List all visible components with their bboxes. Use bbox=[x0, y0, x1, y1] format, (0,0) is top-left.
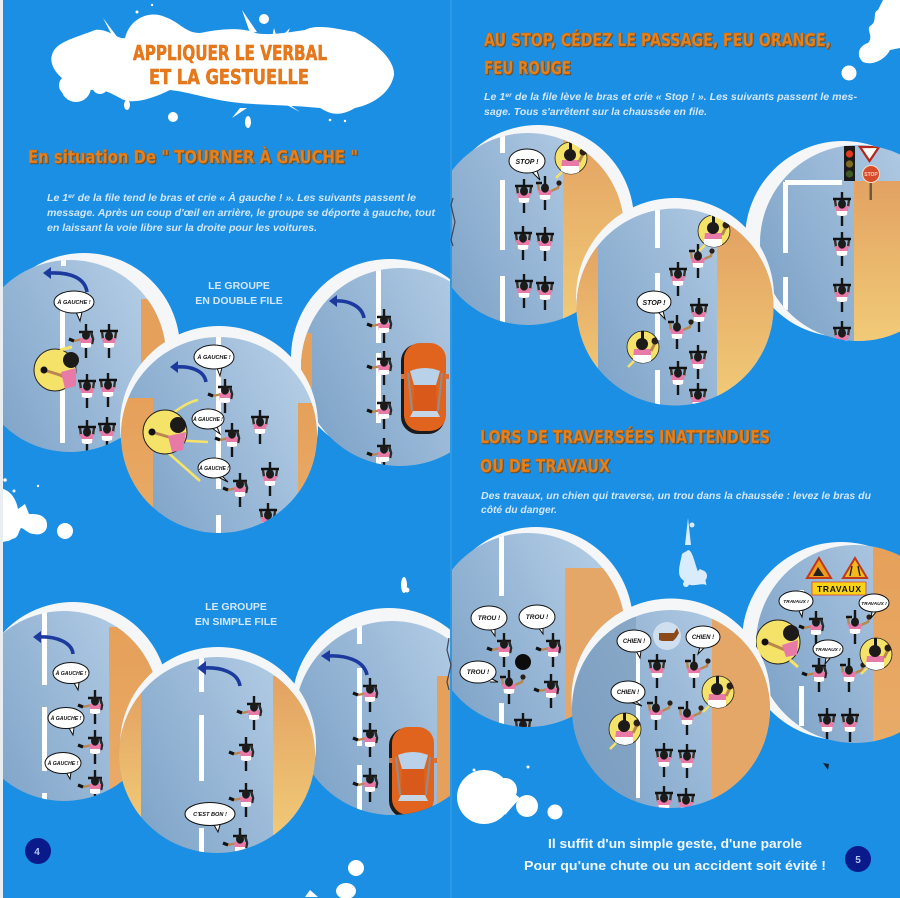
speech bubble: CHIEN ! bbox=[623, 639, 645, 645]
hole in the road bbox=[515, 654, 531, 670]
roadworks sign bbox=[807, 558, 831, 578]
page number 4 bbox=[25, 838, 51, 864]
speech bubble bbox=[198, 458, 230, 482]
intro text: traversées: côté du danger. bbox=[481, 505, 557, 516]
yellow inset bbox=[698, 215, 730, 251]
speech bubble bbox=[859, 594, 889, 618]
speech bubble: STOP ! bbox=[643, 300, 666, 307]
speech bubble bbox=[54, 291, 94, 321]
yellow inset bbox=[34, 347, 79, 391]
speech bubble: À GAUCHE ! bbox=[50, 715, 82, 722]
speech bubble bbox=[519, 605, 555, 634]
speech bubble bbox=[611, 681, 645, 706]
speech bubble: TROU ! bbox=[526, 614, 549, 621]
speech bubble bbox=[48, 708, 84, 735]
intro text: tourner à gauche: de la file tend le bras et crie « À gauche ! ». Les suivants passent le bbox=[75, 191, 416, 204]
stop sign bbox=[862, 166, 880, 200]
yellow inset with arrows bbox=[143, 400, 208, 481]
heading: au stop: FEU ROUGE bbox=[484, 58, 571, 79]
intro text: traversées bbox=[481, 491, 871, 516]
car bbox=[389, 727, 437, 818]
travaux panel: TRAVAUX bbox=[817, 584, 861, 594]
intro text: tourner à gauche: en laissant la voie libre sur la droite pour les voitures. bbox=[47, 223, 317, 234]
label: groupe en simple file bbox=[196, 603, 277, 625]
panel: double file 1 bbox=[3, 253, 179, 452]
page number 4: 4 bbox=[34, 847, 40, 858]
center fold bbox=[450, 0, 452, 898]
label: groupe en double file: EN DOUBLE FILE bbox=[195, 295, 283, 307]
panel: double file 3 bbox=[291, 259, 450, 466]
speech bubble: TRAVAUX ! bbox=[815, 647, 841, 653]
title: ET LA GESTUELLE bbox=[149, 65, 309, 89]
panel: travaux 2 (chien) bbox=[570, 598, 774, 822]
closing message bbox=[524, 836, 826, 873]
left page bbox=[0, 4, 499, 898]
speech bubble bbox=[509, 149, 545, 180]
intro text: au stop: sage. Tous s'arrêtent sur la chaussée en file. bbox=[484, 107, 707, 118]
panel: stop 3 bbox=[745, 141, 900, 355]
intro text: au stop: er bbox=[505, 92, 512, 99]
title bbox=[132, 44, 327, 84]
panel: simple file 2 bbox=[117, 647, 319, 862]
small insect mark bbox=[823, 763, 829, 770]
intro text: au stop: de la file lève le bras et crie « Stop ! ». Les suivants passent le mes- bbox=[512, 92, 858, 103]
label: groupe en simple file: LE GROUPE bbox=[205, 601, 267, 613]
intro text: au stop bbox=[484, 92, 858, 118]
white splash: left bbox=[3, 478, 73, 542]
panel: simple file 1 bbox=[0, 602, 169, 807]
speech bubble bbox=[637, 291, 671, 319]
speech bubble: TRAVAUX ! bbox=[783, 599, 809, 605]
panel: travaux 1 (trou) bbox=[431, 527, 633, 747]
page number 5: 5 bbox=[855, 855, 861, 866]
speech bubble bbox=[185, 802, 235, 832]
arrow: turn left bbox=[321, 650, 367, 675]
staple top bbox=[451, 198, 455, 246]
speech bubble: À GAUCHE ! bbox=[196, 354, 231, 361]
arrow: turn left bbox=[43, 267, 87, 292]
dog crossing bbox=[653, 622, 681, 650]
speech bubble: STOP ! bbox=[516, 159, 539, 166]
panel: stop 1 bbox=[452, 125, 633, 325]
heading: traversées: OU DE TRAVAUX bbox=[480, 456, 610, 477]
panel: simple file 3 bbox=[294, 608, 450, 815]
arrow: turn left bbox=[329, 295, 364, 318]
closing message: Pour qu'une chute ou un accident soit évité ! bbox=[524, 858, 826, 873]
arrow: turn left bbox=[33, 631, 73, 654]
panel: double file 2 bbox=[118, 326, 320, 538]
stop sign: STOP bbox=[864, 172, 878, 178]
yellow inset bbox=[702, 676, 734, 712]
white splash: bottom bbox=[305, 577, 410, 898]
travaux panel bbox=[812, 582, 866, 595]
speech bubble: À GAUCHE ! bbox=[198, 465, 229, 472]
speech bubble bbox=[813, 640, 843, 664]
intro text: au stop: Le 1 bbox=[484, 92, 504, 103]
yellow inset bbox=[860, 638, 892, 674]
speech bubble bbox=[686, 626, 720, 654]
closing message: Il suffit d'un simple geste, d'une parole bbox=[548, 836, 802, 851]
panel: stop 2 bbox=[574, 198, 777, 417]
white splash: bottom left bbox=[457, 766, 562, 824]
speech bubble bbox=[53, 662, 89, 690]
speech bubble bbox=[45, 752, 81, 779]
heading: traversées: LORS DE TRAVERSÉES INATTENDUES bbox=[480, 426, 770, 448]
speech bubble: TROU ! bbox=[478, 615, 501, 622]
speech bubble: TROU ! bbox=[467, 669, 490, 676]
speech bubble bbox=[617, 630, 651, 658]
traffic light bbox=[844, 146, 855, 181]
page number 5 bbox=[845, 846, 871, 872]
label: groupe en simple file: EN SIMPLE FILE bbox=[195, 616, 277, 628]
right page bbox=[431, 0, 900, 873]
speech bubble bbox=[192, 409, 224, 434]
speech bubble: C'EST BON ! bbox=[193, 812, 227, 818]
speech bubble: CHIEN ! bbox=[692, 635, 714, 641]
label: groupe en double file bbox=[196, 282, 282, 304]
car bbox=[401, 343, 449, 434]
speech bubble bbox=[194, 345, 234, 376]
speech bubble: À GAUCHE ! bbox=[47, 760, 79, 767]
title: APPLIQUER LE VERBAL bbox=[133, 41, 327, 65]
staple bottom bbox=[447, 638, 451, 690]
arrow: turn left bbox=[197, 661, 240, 686]
intro text: tourner à gauche: message. Après un coup d'œil en arrière, le groupe se déporte à gauche, tout bbox=[47, 208, 436, 219]
yellow inset bbox=[609, 713, 641, 749]
heading: tourner à gauche: En situation De " TOURNER À GAUCHE " bbox=[28, 146, 358, 168]
speech bubble bbox=[471, 606, 507, 636]
intro text: traversées: Des travaux, un chien qui traverse, un trou dans la chaussée : levez le bras du bbox=[481, 491, 871, 502]
title splash bbox=[51, 4, 394, 128]
heading: traversées bbox=[480, 426, 770, 477]
white splash: center bbox=[679, 518, 707, 587]
speech bubble: À GAUCHE ! bbox=[192, 416, 223, 423]
panel: travaux 3 bbox=[742, 542, 900, 745]
intro text: tourner à gauche: Le 1 bbox=[47, 193, 67, 204]
yellow inset bbox=[627, 331, 659, 367]
speech bubble: À GAUCHE ! bbox=[56, 299, 91, 306]
narrowing road sign bbox=[843, 558, 867, 578]
intro text: tourner à gauche bbox=[47, 191, 436, 234]
speech bubble bbox=[779, 591, 813, 617]
paper edge bbox=[0, 0, 3, 898]
intro text: tourner à gauche: er bbox=[68, 193, 75, 200]
yellow inset: left arm bbox=[756, 620, 800, 667]
heading: au stop bbox=[484, 29, 831, 79]
speech bubble: TRAVAUX ! bbox=[861, 601, 887, 607]
yellow inset bbox=[555, 142, 587, 178]
arrow: turn left bbox=[170, 361, 206, 382]
yield sign bbox=[860, 147, 879, 161]
label: groupe en double file: LE GROUPE bbox=[208, 280, 270, 292]
speech bubble bbox=[460, 661, 498, 683]
speech bubble: À GAUCHE ! bbox=[55, 670, 87, 677]
white splash: top right bbox=[842, 0, 900, 80]
speech bubble: CHIEN ! bbox=[617, 690, 639, 696]
